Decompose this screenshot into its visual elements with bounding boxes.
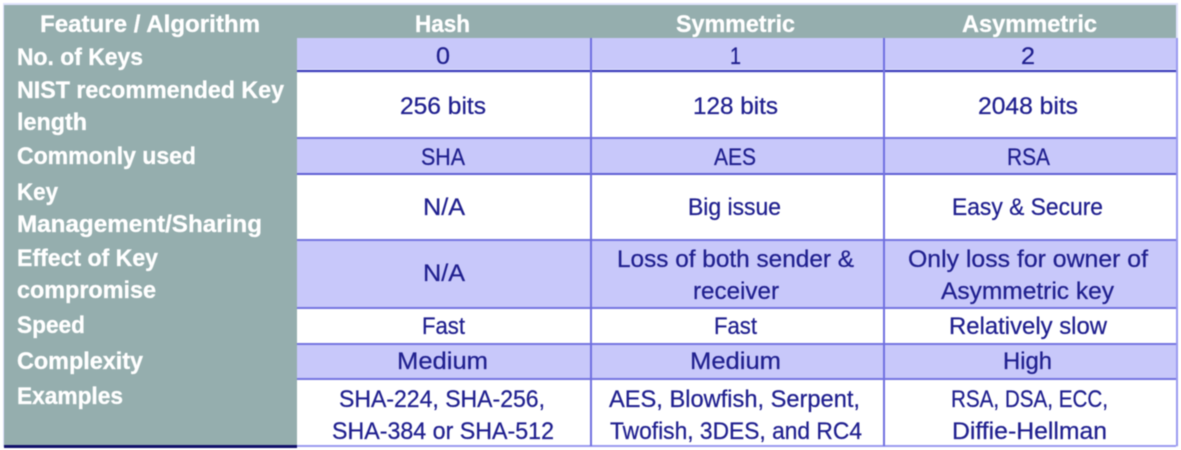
Hash column values: 0	[436, 43, 450, 70]
row labels: Speed	[17, 312, 85, 339]
feature column bottom rule	[4, 445, 297, 448]
Asymmetric column values: Asymmetric key	[941, 278, 1114, 305]
column headings	[40, 11, 1097, 38]
row labels: Management/Sharing	[17, 211, 262, 238]
row labels: Examples	[17, 383, 123, 410]
column headings: Asymmetric	[962, 11, 1097, 38]
column headings: Feature / Algorithm	[40, 11, 260, 38]
Asymmetric column values: Diffie-Hellman	[952, 418, 1107, 445]
Asymmetric column values: Easy & Secure	[952, 194, 1103, 221]
Symmetric column values: 128 bits	[693, 93, 778, 120]
Asymmetric column values: 2	[1021, 43, 1035, 70]
Symmetric column values: AES, Blowfish, Serpent,	[609, 386, 860, 413]
row labels: length	[17, 109, 87, 136]
Symmetric column values: Fast	[714, 313, 757, 340]
Asymmetric column values	[908, 43, 1148, 445]
Hash column values: SHA	[421, 144, 465, 171]
row labels: Commonly used	[17, 143, 196, 170]
Asymmetric column values: High	[1003, 348, 1052, 375]
Symmetric column values: Big issue	[688, 194, 781, 221]
Hash column values	[332, 43, 554, 445]
Symmetric column values: Twofish, 3DES, and RC4	[610, 418, 862, 445]
row labels: Key	[17, 179, 59, 206]
Symmetric column values: AES	[714, 144, 756, 171]
Asymmetric column values: Only loss for owner of	[908, 246, 1148, 273]
Hash column values: N/A	[423, 194, 465, 221]
Hash column values: Medium	[397, 348, 488, 375]
row labels: NIST recommended Key	[17, 77, 285, 104]
Symmetric column values: Medium	[690, 348, 781, 375]
Hash column values: Fast	[422, 313, 465, 340]
table body cells	[297, 38, 1178, 447]
row labels: Complexity	[17, 348, 144, 375]
Symmetric column values: Loss of both sender &	[617, 246, 854, 273]
row labels: Effect of Key	[17, 245, 159, 272]
Symmetric column values	[609, 43, 862, 445]
column headings: Hash	[415, 11, 470, 38]
Asymmetric column values: RSA	[1007, 144, 1050, 171]
Symmetric column values: 1	[730, 43, 741, 70]
Hash column values: SHA-224, SHA-256,	[339, 386, 545, 413]
Hash column values: 256 bits	[400, 93, 486, 120]
column headings: Symmetric	[676, 11, 795, 38]
Hash column values: SHA-384 or SHA-512	[332, 418, 554, 445]
row labels: No. of Keys	[17, 44, 143, 71]
Asymmetric column values: 2048 bits	[978, 93, 1078, 120]
Hash column values: N/A	[423, 260, 465, 287]
Symmetric column values: receiver	[693, 278, 779, 305]
Asymmetric column values: RSA, DSA, ECC,	[951, 386, 1108, 413]
Asymmetric column values: Relatively slow	[949, 313, 1108, 340]
row labels: compromise	[17, 277, 156, 304]
row labels	[17, 44, 285, 410]
